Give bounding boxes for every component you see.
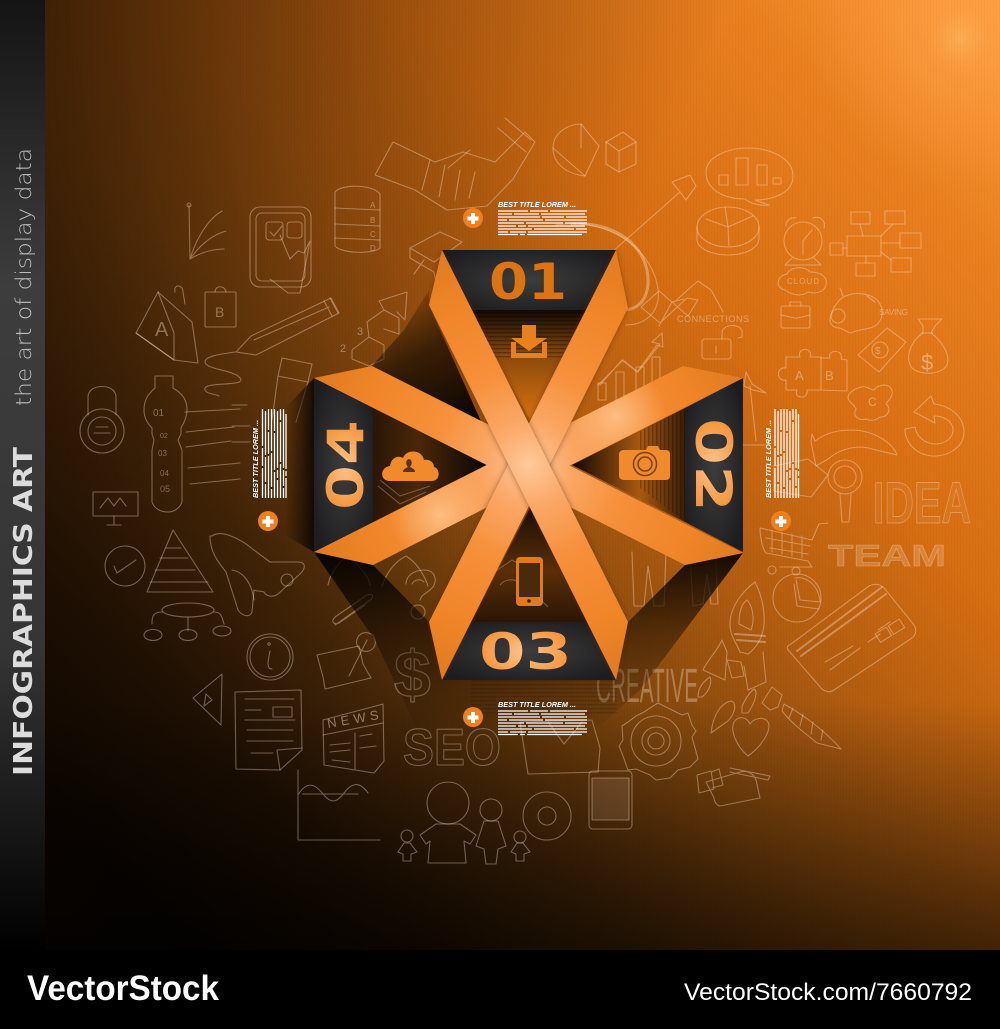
doodle: spiral notebook xyxy=(520,720,600,774)
doodle: database list xyxy=(335,186,380,253)
sidebar title: INFOGRAPHICS ART xyxy=(9,447,39,776)
block lines xyxy=(775,409,798,498)
doodle: credit card xyxy=(787,584,916,692)
ribbon: top-left to bottom-right xyxy=(429,250,628,680)
doodle: round pie xyxy=(773,574,821,622)
block title: BEST TITLE LOREM ... xyxy=(498,200,576,209)
doodle: money bag xyxy=(909,319,948,375)
doodle: fan shapes xyxy=(328,555,428,586)
doodle: handshake xyxy=(375,118,535,210)
doodle: puzzle pieces: A xyxy=(795,368,804,383)
crossed orange ribbons xyxy=(314,250,743,680)
doodle: big curved arrow xyxy=(811,430,897,466)
doodle: briefcase xyxy=(781,302,810,328)
doodle: padlock xyxy=(80,386,124,453)
inner triangle: bottom xyxy=(471,508,587,622)
doodle: database list: B xyxy=(370,216,375,225)
inner triangle: top xyxy=(471,310,587,420)
ribbon: left-top to right-bottom xyxy=(314,366,743,565)
inner triangle: right xyxy=(572,408,685,522)
block title: BEST TITLE LOREM ... xyxy=(498,700,576,709)
icon: user cloud xyxy=(382,451,439,481)
doodle: piggy bank: SAVING xyxy=(879,308,908,317)
doodle: shopping bag B: B xyxy=(215,304,224,320)
info block: right xyxy=(764,409,798,531)
doodle: growth curves xyxy=(187,203,226,259)
doodle: database list: C xyxy=(370,230,376,239)
plus button xyxy=(463,707,483,727)
panel 03 xyxy=(442,622,616,681)
doodle: flame drops xyxy=(698,677,756,733)
doodle: money bag: $ xyxy=(921,350,933,375)
icon: smartphone xyxy=(516,557,543,606)
inner triangle: left xyxy=(373,408,487,522)
doodle: question mark xyxy=(406,570,435,619)
footer band xyxy=(0,950,1000,1029)
plus button xyxy=(258,511,278,531)
doodle: shopping bag A: A xyxy=(155,319,169,341)
doodle: banknote: $ xyxy=(875,346,881,357)
doodle: puzzle pieces: B xyxy=(825,368,834,383)
doodle: magnifier xyxy=(828,460,862,522)
doodle: TEAM lettering: TEAM xyxy=(828,538,946,573)
doodle: puzzle C: C xyxy=(868,395,877,409)
panel 01 xyxy=(442,250,616,311)
number 01: 01 xyxy=(489,253,567,311)
icon: download xyxy=(511,325,547,358)
block lines xyxy=(262,409,286,498)
doodle: banknote xyxy=(858,328,906,372)
panel 04 xyxy=(314,378,375,552)
block lines xyxy=(498,711,587,734)
doodle: connections graph xyxy=(641,281,749,326)
doodle: piggy bank xyxy=(830,288,908,333)
footer logo: VectorStock xyxy=(27,969,220,1008)
doodle: bottle with labels: 02 xyxy=(160,433,168,440)
doodle: triangle play xyxy=(193,674,222,725)
doodle: paperclip xyxy=(333,594,373,625)
doodle: book under cloud xyxy=(378,480,430,504)
doodle: USB stick xyxy=(272,358,312,422)
doodle: books xyxy=(410,232,462,284)
doodle: newspaper xyxy=(323,704,384,773)
doodle: cloud xyxy=(778,268,826,295)
doodle: shopping bag B xyxy=(205,287,236,327)
doodle: rising bar chart xyxy=(598,333,663,400)
footer url: VectorStock.com/7660792 xyxy=(684,979,972,1006)
doodle: necktie xyxy=(762,687,841,749)
number 03: 03 xyxy=(479,623,572,681)
doodle: 3D pie chart xyxy=(553,124,636,176)
icon: camera xyxy=(619,446,670,480)
plus button xyxy=(463,208,483,228)
block title: BEST TITLE LOREM ... xyxy=(764,420,773,498)
number 02: 02 xyxy=(684,418,742,512)
doodle: database list: A xyxy=(370,201,376,210)
doodle: org chart xyxy=(144,603,231,640)
hand-drawn doodles background xyxy=(80,118,971,864)
doodle: bottle with labels xyxy=(144,376,250,512)
doodle: airplane xyxy=(210,534,304,616)
hand-drawn doodles background: CREATIVE xyxy=(596,660,698,713)
doodle: pencil and squiggle xyxy=(205,298,339,396)
doodle: heart xyxy=(733,718,769,756)
doodle: bottle with labels: 01 xyxy=(153,408,165,419)
number 04: 04 xyxy=(317,420,375,510)
doodle: bottle with labels: 03 xyxy=(158,449,167,458)
doodle: info circle xyxy=(247,634,293,680)
doodle: line chart axes xyxy=(298,770,380,840)
doodle: connections graph: CONNECTIONS xyxy=(677,314,749,324)
doodle: disc xyxy=(523,792,571,840)
doodle: gear xyxy=(619,703,698,780)
doodle: pyramid xyxy=(147,530,213,592)
doodle: rocket xyxy=(703,582,766,690)
doodle: stairs arrow: 3 xyxy=(357,326,363,338)
sidebar xyxy=(0,0,45,950)
doodle: dart arrow xyxy=(556,175,696,325)
doodle: alarm clock xyxy=(784,217,825,265)
doodle: tablet xyxy=(589,771,632,829)
block lines xyxy=(498,211,587,234)
doodle: mind map xyxy=(830,211,921,276)
ribbon: left-bottom to right-top xyxy=(314,366,743,565)
doodle: document page xyxy=(235,690,302,770)
doodle: shopping bag A xyxy=(136,286,198,363)
doodle: database list: D xyxy=(370,244,376,253)
doodle: trousers xyxy=(632,550,718,606)
doodle: presentation screen xyxy=(93,492,138,525)
ribbon: top-right to bottom-left xyxy=(429,250,628,680)
doodle: pie chart xyxy=(697,207,759,255)
doodle: bottle with labels: 05 xyxy=(160,484,170,494)
block title: BEST TITLE LOREM ... xyxy=(251,420,260,498)
panel 02 xyxy=(684,378,743,552)
doodle: notes and pen xyxy=(697,768,770,806)
doodle: open padlock xyxy=(702,326,742,359)
sidebar tagline: the art of display data xyxy=(12,148,36,406)
long drop shadows xyxy=(285,290,743,735)
doodle: newspaper: NEWS xyxy=(326,707,380,731)
doodle: shopping cart xyxy=(760,523,828,575)
doodle: puzzle pieces xyxy=(778,350,847,397)
doodle: dollar sign: $ xyxy=(394,637,431,711)
doodle: stairs arrow xyxy=(340,292,407,366)
doodle: hand on tablet xyxy=(250,207,311,293)
doodle: pin note xyxy=(317,633,375,689)
info block: left xyxy=(251,409,286,531)
doodle: puzzle C xyxy=(848,385,892,420)
doodle: people xyxy=(398,782,530,864)
doodle: check circle xyxy=(105,546,145,586)
doodle: envelope xyxy=(774,459,828,497)
doodle: stairs arrow: 2 xyxy=(340,343,346,355)
doodle: bottle with labels: 04 xyxy=(160,469,169,478)
info block: top xyxy=(463,200,587,234)
info block: bottom xyxy=(463,700,587,734)
doodle: speech bubble with bars xyxy=(706,148,793,205)
doodle: diagonal flag xyxy=(740,372,770,445)
doodle: SEO lettering: SEO xyxy=(403,719,501,777)
doodle: cloud: CLOUD xyxy=(787,277,819,286)
doodle: circular arrow xyxy=(905,396,964,456)
plus button xyxy=(771,511,791,531)
